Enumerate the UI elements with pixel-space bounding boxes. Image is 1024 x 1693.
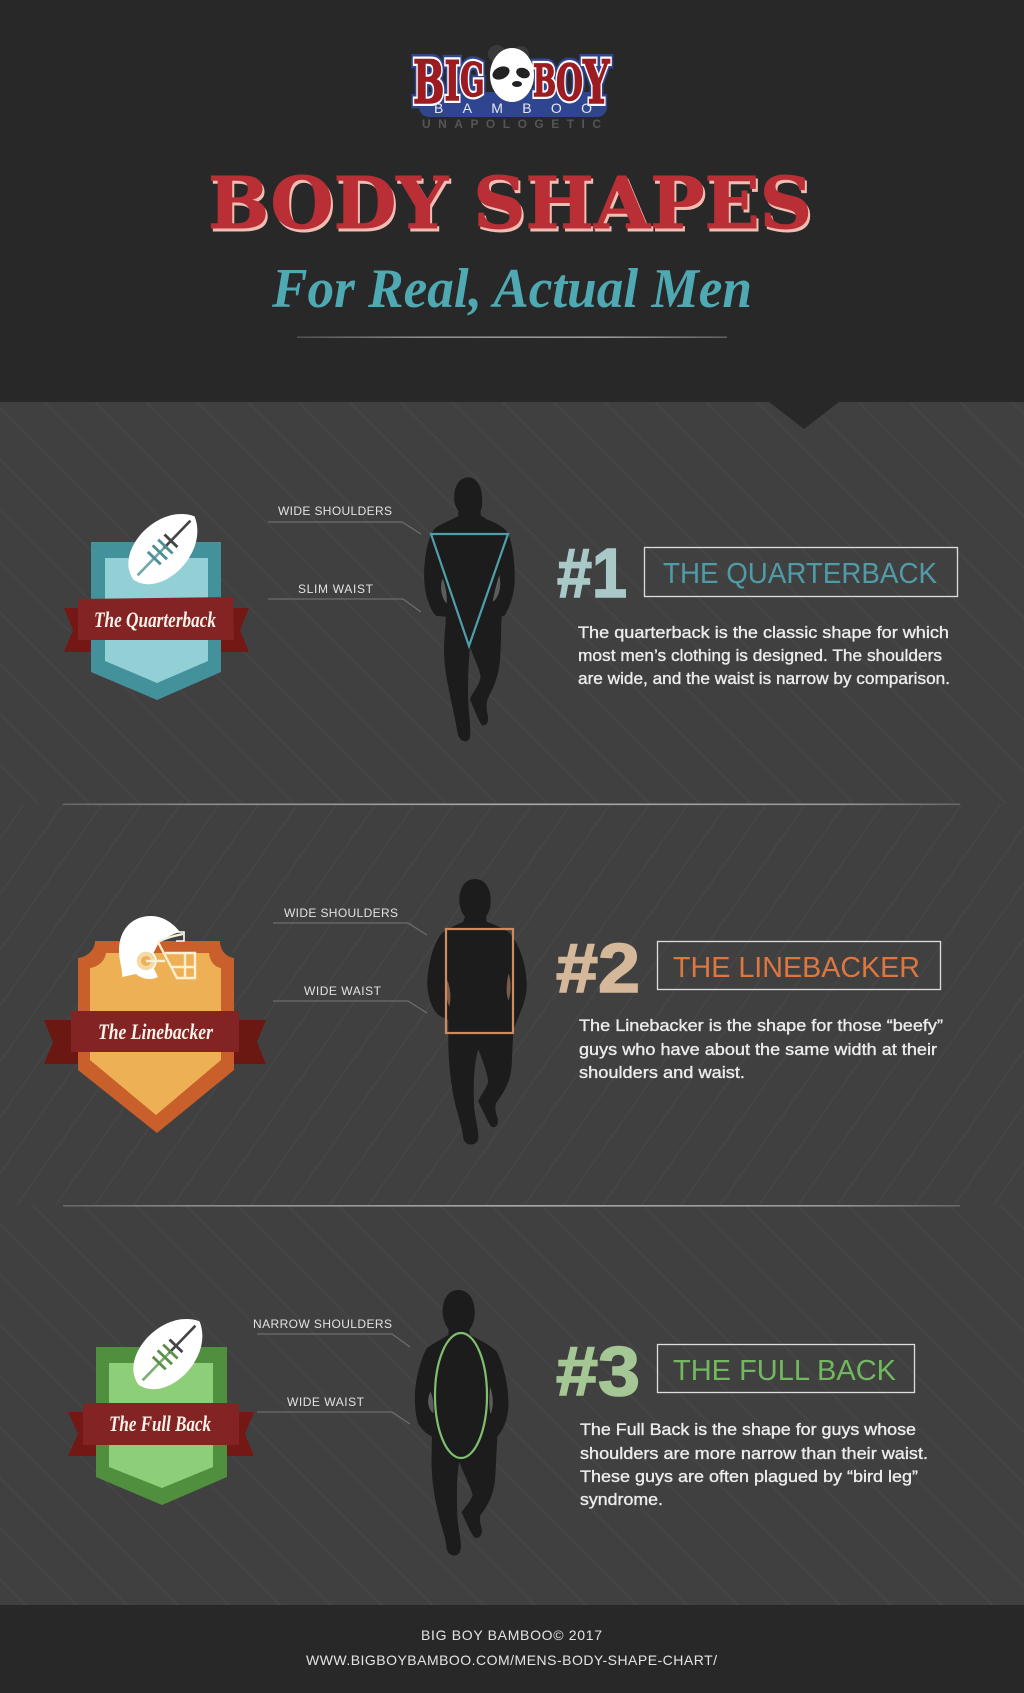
divider bbox=[63, 1205, 960, 1207]
shape: rectangle bbox=[446, 929, 513, 1033]
footer bbox=[0, 1605, 1024, 1693]
logo: Big Boy Bamboo: Y bbox=[582, 47, 611, 117]
text: linebacker description bbox=[579, 1017, 943, 1082]
silhouette 3 bbox=[415, 1290, 508, 1556]
logo: Big Boy Bamboo bbox=[413, 45, 611, 131]
logo: Big Boy Bamboo: I bbox=[444, 50, 460, 113]
badge: full back bbox=[68, 1303, 254, 1505]
logo: Big Boy Bamboo: I bbox=[444, 50, 460, 113]
annotation: narrow shoulders: NARROW SHOULDERS bbox=[253, 1317, 392, 1331]
annotation: wide shoulders bbox=[268, 504, 421, 534]
logo: Big Boy Bamboo: Y bbox=[582, 47, 611, 117]
annotation: narrow shoulders bbox=[253, 1317, 410, 1347]
annotation: wide shoulders: WIDE SHOULDERS bbox=[284, 906, 398, 920]
icon: football bbox=[120, 1303, 218, 1403]
logo: Big Boy Bamboo: G bbox=[460, 54, 484, 108]
annotation: wide shoulders bbox=[273, 906, 427, 935]
divider bbox=[63, 804, 960, 805]
text: full back description: shoulders are more narrow than their waist. bbox=[580, 1445, 928, 1463]
badge: quarterback bbox=[64, 498, 249, 700]
badge: linebacker: The Linebacker bbox=[98, 1019, 213, 1044]
panel: section 1 background bbox=[0, 402, 1024, 804]
annotation: wide waist bbox=[257, 1395, 410, 1424]
badge: full back: The Full Back bbox=[109, 1411, 211, 1436]
badge: linebacker bbox=[44, 916, 266, 1133]
logo: Big Boy Bamboo: O bbox=[556, 53, 583, 112]
silhouette 2 bbox=[427, 879, 527, 1145]
logo: Big Boy Bamboo: G bbox=[460, 54, 484, 108]
heading box: the full back: THE FULL BACK bbox=[673, 1355, 897, 1387]
annotation: slim waist bbox=[268, 582, 421, 612]
logo: Big Boy Bamboo: G bbox=[460, 54, 484, 108]
shape: ellipse bbox=[435, 1333, 487, 1458]
annotation: wide waist: WIDE WAIST bbox=[304, 984, 382, 998]
logo: Big Boy Bamboo: B bbox=[413, 47, 444, 117]
number 3: #3 bbox=[556, 1332, 640, 1410]
heading box: the quarterback bbox=[644, 548, 958, 596]
logo: Big Boy Bamboo: B bbox=[413, 47, 444, 117]
text: linebacker description: guys who have about the same width at their bbox=[579, 1041, 938, 1059]
shape: inverted triangle bbox=[431, 534, 508, 646]
logo: Big Boy Bamboo: O bbox=[556, 53, 583, 112]
title rule bbox=[297, 336, 727, 338]
logo: Big Boy Bamboo: B bbox=[533, 55, 556, 107]
text: quarterback description: are wide, and the waist is narrow by comparison. bbox=[578, 670, 950, 688]
footer: BIG BOY BAMBOO© 2017 bbox=[421, 1627, 602, 1643]
text: quarterback description bbox=[578, 624, 950, 688]
section 2: linebacker bbox=[44, 879, 943, 1145]
text: full back description: The Full Back is the shape for guys whose bbox=[580, 1421, 916, 1439]
footer: WWW.BIGBOYBAMBOO.COM/MENS-BODY-SHAPE-CHART/ bbox=[306, 1652, 717, 1668]
annotation: slim waist: SLIM WAIST bbox=[298, 582, 374, 596]
subtitle: For Real, Actual Men bbox=[271, 258, 752, 320]
text: linebacker description: shoulders and waist. bbox=[579, 1064, 745, 1082]
logo: Big Boy Bamboo: Y bbox=[582, 47, 611, 117]
text: quarterback description: most men’s clothing is designed. The shoulders bbox=[578, 647, 942, 665]
logo: Big Boy Bamboo: B bbox=[533, 55, 556, 107]
text: linebacker description: The Linebacker is the shape for those “beefy” bbox=[579, 1017, 943, 1035]
title: BODY SHAPES bbox=[210, 164, 814, 248]
icon: helmet bbox=[119, 916, 195, 979]
logo: Big Boy Bamboo: BAMBOO bbox=[434, 100, 592, 116]
text: full back description: These guys are often plagued by “bird leg” bbox=[580, 1468, 918, 1486]
heading box: the full back bbox=[658, 1344, 914, 1392]
number 1: #1 bbox=[557, 534, 627, 612]
logo: Big Boy Bamboo: O bbox=[556, 53, 583, 112]
logo: Big Boy Bamboo: B bbox=[413, 47, 444, 117]
panel: section 2 background bbox=[0, 804, 1024, 1205]
silhouette 1 bbox=[424, 477, 515, 741]
logo: Big Boy Bamboo: UNAPOLOGETIC bbox=[422, 117, 601, 131]
logo: Big Boy Bamboo: I bbox=[444, 50, 460, 113]
number 2: #2 bbox=[556, 929, 640, 1007]
text: quarterback description: The quarterback is the classic shape for which bbox=[578, 624, 949, 642]
panel: header background bbox=[0, 0, 1024, 402]
logo: Big Boy Bamboo: B bbox=[533, 55, 556, 107]
text: full back description: syndrome. bbox=[580, 1491, 663, 1509]
panel: section 3 background bbox=[0, 1205, 1024, 1605]
heading box: the linebacker: THE LINEBACKER bbox=[673, 952, 920, 984]
heading box: the quarterback: THE QUARTERBACK bbox=[663, 558, 938, 590]
icon: football bbox=[115, 498, 213, 598]
heading box: the linebacker bbox=[658, 942, 940, 990]
section 1: quarterback bbox=[64, 477, 958, 741]
text: full back description bbox=[580, 1421, 928, 1509]
arrow: header pointer bbox=[769, 402, 839, 429]
title: BODY SHAPES bbox=[208, 161, 812, 245]
annotation: wide shoulders: WIDE SHOULDERS bbox=[278, 504, 392, 518]
annotation: wide waist: WIDE WAIST bbox=[287, 1395, 365, 1409]
badge: quarterback: The Quarterback bbox=[94, 607, 216, 632]
section 3: full back bbox=[68, 1290, 928, 1556]
annotation: wide waist bbox=[273, 984, 427, 1013]
